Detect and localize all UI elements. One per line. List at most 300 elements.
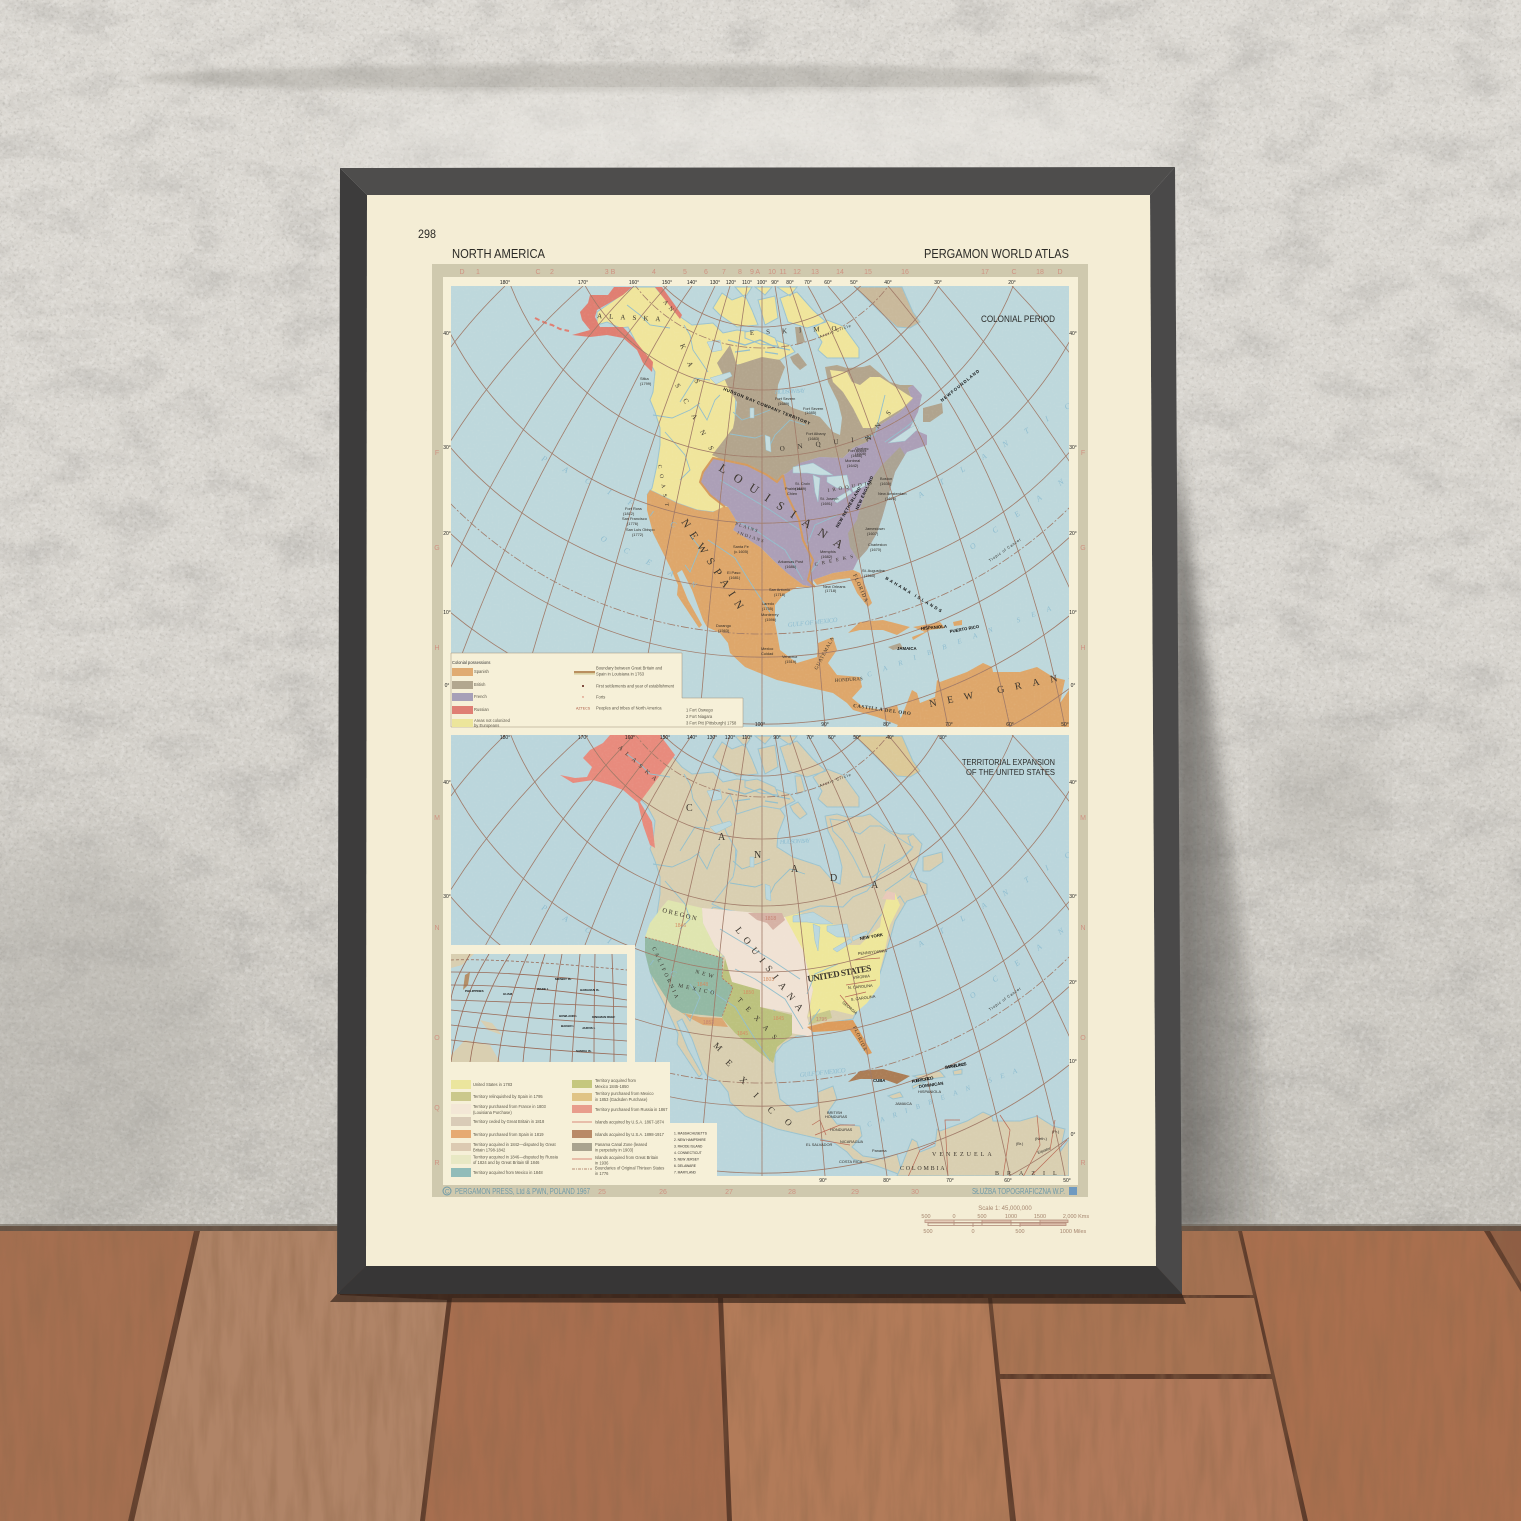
colonial period heading: COLONIAL PERIOD bbox=[981, 314, 1055, 325]
Greenland bbox=[855, 736, 920, 777]
meridian labels inside map bottom: 90° bbox=[821, 722, 829, 728]
graticule labels around maps: 60° bbox=[1004, 1178, 1012, 1184]
thirteen states key: 4. CONNECTICUT bbox=[674, 1151, 702, 1155]
graticule labels around maps: 60° bbox=[824, 280, 832, 286]
graticule labels around maps: 150° bbox=[660, 735, 670, 741]
place labels expansion map: CALIFORNIA bbox=[650, 946, 680, 1002]
left column: of 1824 and by Great Britain till 1846 bbox=[473, 1160, 540, 1165]
legend: colonial period: Colonial possessions bbox=[452, 660, 490, 665]
1818 cession bbox=[748, 913, 785, 930]
place labels colonial map: El Paso bbox=[727, 570, 740, 575]
place labels expansion map: COLOMBIA bbox=[900, 1166, 946, 1172]
frame floor shadow bbox=[330, 1294, 1186, 1304]
footer band text: 25 bbox=[598, 1189, 606, 1196]
place labels colonial map: HISPANIOLA bbox=[921, 624, 947, 631]
place labels expansion map: (Fr.) bbox=[1052, 1129, 1060, 1134]
place labels expansion map: HISPANIOLA bbox=[918, 1089, 941, 1094]
place labels expansion map: A bbox=[791, 864, 799, 875]
Greenland bbox=[855, 287, 920, 328]
place labels colonial map: San Antonio bbox=[769, 587, 790, 592]
graticule labels around maps: 160° bbox=[629, 280, 639, 286]
place labels colonial map: Santa Fe bbox=[733, 544, 749, 549]
place labels expansion map: A bbox=[871, 880, 879, 891]
place labels colonial map: (1689) bbox=[795, 486, 807, 491]
graticule labels around maps: 10° bbox=[443, 610, 451, 616]
border grid references: 5 bbox=[683, 269, 687, 276]
footer band text: SŁUŻBA TOPOGRAFICZNA W.P. bbox=[972, 1187, 1065, 1196]
place labels colonial map: (1686) bbox=[851, 453, 863, 458]
place labels expansion map: TEXAS bbox=[736, 996, 784, 1047]
Alaska purchase bbox=[560, 735, 675, 848]
place labels expansion map: PACIFIC bbox=[539, 902, 695, 988]
place labels colonial map: Jamestown bbox=[865, 526, 885, 531]
border grid references: O bbox=[434, 1035, 440, 1042]
thirteen states key: 5. NEW JERSEY bbox=[674, 1158, 700, 1162]
place labels expansion map bbox=[539, 745, 1089, 1177]
place labels expansion map: D bbox=[830, 873, 837, 884]
place labels colonial map: (1563) bbox=[718, 628, 730, 633]
place labels expansion map: (Br.) bbox=[1016, 1141, 1024, 1146]
place labels colonial map: San Luis Obispo bbox=[626, 527, 655, 532]
place labels colonial map: Tropic of Cancer bbox=[988, 537, 1022, 563]
place labels expansion map: VENEZUELA bbox=[932, 1152, 995, 1158]
place labels colonial map: (1691) bbox=[821, 501, 833, 506]
map heading bbox=[962, 757, 1055, 777]
place labels colonial map: HUDSON BAY COMPANY TERRITORY bbox=[723, 386, 811, 426]
boundary Great Britain and Spain bbox=[700, 458, 815, 587]
map heading: TERRITORIAL EXPANSION bbox=[962, 757, 1055, 767]
Russian Alaska bbox=[535, 287, 682, 372]
thirteen states key: 1. MASSACHUSETTS bbox=[674, 1132, 708, 1136]
place labels expansion map: C bbox=[766, 1104, 777, 1116]
place labels expansion map: I bbox=[752, 1090, 761, 1100]
graticule labels around maps: 40° bbox=[443, 780, 451, 786]
footer band text: 27 bbox=[725, 1189, 733, 1196]
place labels colonial map: Cuidad bbox=[761, 651, 773, 656]
graticule labels around maps: 90° bbox=[771, 280, 779, 286]
place labels expansion map: X bbox=[738, 1074, 750, 1086]
place labels colonial map: Veracruz bbox=[782, 654, 797, 659]
scale bar: 500 bbox=[921, 1214, 931, 1220]
place labels colonial map: (1689) bbox=[778, 401, 790, 406]
meridian labels bottom: 100° bbox=[757, 1177, 767, 1183]
inset map: Pacific islands: KINGMAN REEF bbox=[592, 1015, 615, 1019]
swatch Spanish bbox=[452, 668, 473, 676]
Cuba bbox=[848, 1069, 910, 1084]
left column: Territory acquired in 1842—disputed by Great bbox=[473, 1142, 556, 1147]
place labels colonial map: ANS bbox=[862, 400, 901, 443]
Texas bbox=[722, 958, 792, 1063]
land base bbox=[597, 736, 1069, 1176]
place labels colonial map: Laredo bbox=[762, 601, 774, 606]
map border band bbox=[432, 264, 1088, 1197]
scale bar: 1500 bbox=[1034, 1214, 1046, 1220]
place labels colonial map: FLORIDA bbox=[851, 573, 869, 604]
right column bbox=[572, 1078, 668, 1176]
border grid references: 3 B bbox=[605, 269, 616, 276]
legend: colonial period: 1 Fort Oswego bbox=[686, 708, 714, 712]
thirteen states key: 3. RHODE ISLAND bbox=[674, 1144, 703, 1148]
page number: 298 bbox=[418, 227, 436, 241]
thirteen states key: 7. MARYLAND bbox=[674, 1170, 697, 1174]
place labels expansion map: Equator bbox=[1037, 1145, 1052, 1155]
border grid references: Q bbox=[434, 1105, 440, 1112]
rivers bbox=[627, 305, 915, 612]
lakes and St Lawrence bbox=[707, 340, 919, 503]
place labels colonial map: (1772) bbox=[632, 532, 644, 537]
place labels expansion map: Arctic Circle bbox=[819, 772, 851, 788]
legend: colonial period: Spanish bbox=[474, 669, 490, 674]
Florida bbox=[807, 1020, 872, 1055]
place labels colonial map: Quebec bbox=[855, 446, 869, 451]
Oregon bbox=[645, 900, 723, 957]
right column: in 1776 bbox=[595, 1171, 609, 1176]
graticule labels around maps: 50° bbox=[1063, 1178, 1071, 1184]
print mottling over maps bbox=[451, 286, 1069, 1176]
place labels colonial map: CREEKS bbox=[814, 554, 858, 568]
legend: colonial period: French bbox=[474, 694, 487, 699]
boundary symbol bbox=[574, 671, 595, 675]
place labels colonial map: Charleston bbox=[868, 542, 887, 547]
place labels expansion map: CUBA bbox=[873, 1078, 885, 1083]
place labels colonial map: (1683) bbox=[808, 436, 820, 441]
border grid references: M bbox=[434, 815, 440, 822]
territory from Spain 1795 bbox=[808, 1010, 832, 1025]
graticule labels around maps: 30° bbox=[443, 445, 451, 451]
place labels colonial map: San Francisco bbox=[622, 516, 647, 521]
place labels expansion map: S. CAROLINA bbox=[850, 994, 876, 1002]
swatch British bbox=[452, 681, 473, 689]
border grid references: 8 bbox=[738, 269, 742, 276]
graticule labels around maps: 130° bbox=[710, 280, 720, 286]
place labels colonial map: Fort Severn bbox=[803, 406, 823, 411]
place labels colonial map: St. Croix bbox=[795, 481, 810, 486]
place labels colonial map: COAST bbox=[656, 464, 670, 513]
graticule labels around maps: 170° bbox=[578, 280, 588, 286]
place labels colonial map: ONQUIN bbox=[779, 432, 885, 453]
border grid references: H bbox=[434, 645, 440, 652]
graticule labels around maps: 60° bbox=[828, 735, 836, 741]
footer band text: C bbox=[445, 1188, 450, 1196]
graticule labels around maps: 30° bbox=[934, 280, 942, 286]
inset map: Pacific islands: MIDWAY IS. bbox=[555, 977, 572, 981]
place labels expansion map: OREGON bbox=[662, 907, 699, 923]
legend: colonial period: Spain in Louisiana in 1763 bbox=[596, 672, 645, 676]
thirteen states key: 2. NEW HAMPSHIRE bbox=[674, 1138, 707, 1142]
graticule labels around maps: 140° bbox=[687, 735, 697, 741]
graticule labels around maps: 20° bbox=[1069, 980, 1077, 986]
graticule labels around maps: 40° bbox=[1069, 780, 1077, 786]
graticule labels around maps: 90° bbox=[819, 1178, 827, 1184]
border grid references: 17 bbox=[981, 269, 989, 276]
graticule labels around maps: 0° bbox=[445, 683, 449, 689]
place labels colonial map: OCEAN bbox=[599, 534, 716, 599]
legend: colonial period: Russian bbox=[474, 707, 490, 712]
footer band text: 30 bbox=[911, 1189, 919, 1196]
place labels colonial map: New Orleans bbox=[823, 584, 846, 589]
place labels colonial map: Arctic Circle bbox=[819, 323, 851, 339]
place labels expansion map: 1803 bbox=[763, 977, 774, 983]
graticule labels around maps: 90° bbox=[773, 735, 781, 741]
place labels colonial map: KAS bbox=[678, 343, 707, 398]
place labels colonial map: Fort Severn bbox=[775, 396, 795, 401]
place labels expansion map: PENNSYLVANIA bbox=[858, 948, 888, 956]
place labels expansion map: 1845 bbox=[737, 1031, 748, 1037]
Gadsden purchase bbox=[682, 1013, 728, 1027]
legend: colonial period: Areas not colonized bbox=[474, 718, 511, 723]
border grid references: F bbox=[1081, 450, 1085, 457]
place labels expansion map: OCEAN bbox=[968, 913, 1083, 1001]
place labels expansion map: 1846 bbox=[675, 923, 686, 929]
place labels colonial map: ATLANTIC bbox=[916, 391, 1089, 500]
meridian labels inside map bottom: 60° bbox=[1006, 722, 1014, 728]
place labels expansion map: JAMAICA bbox=[895, 1101, 912, 1106]
United States in 1783 bbox=[785, 893, 900, 1017]
border grid references: D bbox=[1057, 269, 1063, 276]
place labels expansion map: N. CAROLINA bbox=[848, 983, 873, 990]
place labels expansion map: 1845 bbox=[773, 1016, 784, 1022]
right column: Islands acquired from Great Britain bbox=[595, 1155, 659, 1160]
place labels colonial map: (1608) bbox=[855, 451, 867, 456]
place labels expansion map: C bbox=[686, 803, 693, 814]
place labels colonial map: SCANS bbox=[673, 382, 721, 463]
place labels colonial map: CARIBBEAN SEA bbox=[866, 601, 1063, 679]
inset map: Pacific islands: WAKE I. bbox=[537, 987, 549, 991]
meridian labels inside map bottom: 100° bbox=[755, 722, 765, 728]
place labels colonial map: OCEAN bbox=[968, 464, 1083, 552]
place labels colonial map: INDIANS bbox=[737, 530, 766, 544]
border grid references: N bbox=[434, 925, 440, 932]
ocean bbox=[451, 286, 1069, 727]
place labels colonial map: Durango bbox=[716, 623, 731, 628]
place labels colonial map: NEWFOUNDLAND bbox=[939, 368, 981, 403]
border grid references: G bbox=[434, 545, 440, 552]
place labels colonial map: New Amsterdam bbox=[878, 491, 907, 496]
place labels colonial map: GULF OF MEXICO bbox=[787, 617, 838, 629]
place labels colonial map: St. Augustine bbox=[862, 568, 885, 573]
place labels colonial map: PUERTO RICO bbox=[949, 624, 980, 634]
place labels expansion map: BRITISH bbox=[827, 1110, 843, 1115]
right column: in perpetuity in 1903) bbox=[595, 1148, 634, 1152]
footer band text bbox=[443, 1187, 1077, 1196]
place labels colonial map: CASTILLA DEL ORO bbox=[853, 704, 912, 717]
legend: colonial period: by Europeans bbox=[474, 723, 499, 728]
left column: (Louisiana Purchase) bbox=[473, 1110, 512, 1115]
British colonies bbox=[848, 447, 905, 560]
scale bar: Scale 1: 45,000,000 bbox=[978, 1206, 1032, 1212]
right column: Islands acquired by U.S.A. 1867-1874 bbox=[595, 1120, 665, 1124]
place labels expansion map: MEXICO bbox=[678, 983, 718, 997]
graticule labels around maps: 110° bbox=[742, 735, 752, 741]
place labels expansion map: UNITED STATES bbox=[807, 963, 872, 984]
place labels colonial map: (1685) bbox=[805, 410, 817, 415]
graticule labels around maps: 80° bbox=[786, 280, 794, 286]
graticule labels around maps bbox=[443, 280, 1077, 1184]
place labels colonial map: Montreal bbox=[845, 458, 860, 463]
US territorial acquisitions bbox=[645, 891, 900, 1063]
border grid references: 4 bbox=[652, 269, 656, 276]
right column: Islands acquired by U.S.A. 1898-1917 bbox=[595, 1132, 665, 1137]
graticule labels around maps: 120° bbox=[725, 735, 735, 741]
place labels colonial map bbox=[539, 299, 1123, 717]
place labels colonial map: (c.1605) bbox=[734, 549, 749, 554]
border grid references: O bbox=[1080, 1035, 1086, 1042]
border grid references: 14 bbox=[836, 269, 844, 276]
legend: colonial period: Peoples and tribes of North America bbox=[596, 706, 662, 710]
place labels colonial map: (1755) bbox=[762, 606, 774, 611]
place labels expansion map: PUERTO RICO bbox=[911, 1075, 934, 1084]
legend: territorial expansion bbox=[451, 1062, 717, 1177]
place labels colonial map: (1642) bbox=[847, 463, 859, 468]
graticule labels around maps: 30° bbox=[1069, 445, 1077, 451]
legend: colonial period: Boundary between Great Britain and bbox=[596, 666, 663, 670]
graticule labels around maps: 110° bbox=[742, 280, 752, 286]
right column: Mexico 1845-1850 bbox=[595, 1084, 629, 1089]
graticule labels around maps: 30° bbox=[939, 735, 947, 741]
border grid references: R bbox=[1080, 1160, 1086, 1167]
graticule labels around maps: 10° bbox=[1069, 1059, 1077, 1065]
scale bar: 500 bbox=[923, 1229, 933, 1235]
place labels colonial map: (1812) bbox=[623, 511, 635, 516]
inset map: Pacific islands: GUAM bbox=[503, 992, 513, 996]
place labels expansion map: HONDURAS bbox=[825, 1114, 848, 1119]
graticule labels around maps: 40° bbox=[886, 735, 894, 741]
Labrador unclaimed area bbox=[830, 370, 913, 428]
graticule labels around maps: 50° bbox=[853, 735, 861, 741]
ocean bbox=[451, 735, 1069, 1176]
graticule labels around maps: 30° bbox=[1069, 894, 1077, 900]
place labels expansion map: SWAN ISLANDS bbox=[944, 1061, 967, 1070]
right column: in 1936 bbox=[595, 1160, 609, 1166]
Louisiana purchase bbox=[702, 908, 813, 1037]
Spanish possessions bbox=[647, 490, 1069, 727]
place labels colonial map: (1596) bbox=[765, 617, 777, 622]
place labels expansion map: VIRGINIA bbox=[853, 973, 870, 980]
graticule labels around maps: 40° bbox=[443, 331, 451, 337]
place labels expansion map: M bbox=[712, 1040, 724, 1053]
graticule labels around maps: 0° bbox=[1071, 1132, 1075, 1138]
place labels colonial map: HUDSON BAY bbox=[774, 388, 806, 396]
place labels expansion map: CARIBBEAN SEA bbox=[866, 1064, 1027, 1129]
place labels colonial map: NEW GRANADA bbox=[928, 660, 1123, 710]
inset map: Pacific islands: JARVIS I. bbox=[582, 1026, 595, 1030]
inset map: Pacific islands: HAWAIIAN IS. bbox=[580, 988, 600, 992]
place labels expansion map: LOUISIANA bbox=[733, 926, 808, 1019]
border grid references: G bbox=[1080, 545, 1086, 552]
place labels colonial map: St. Joseph bbox=[820, 496, 838, 501]
atlas title: PERGAMON WORLD ATLAS bbox=[924, 247, 1069, 261]
border grid references: 18 bbox=[1036, 269, 1044, 276]
place labels colonial map: ALASKA bbox=[597, 312, 668, 324]
right column: Territory acquired from bbox=[595, 1078, 637, 1083]
place labels colonial map: (1670) bbox=[870, 547, 882, 552]
place labels colonial map: Fort Abitibi bbox=[848, 448, 867, 453]
graticule labels around maps: 120° bbox=[726, 280, 736, 286]
graticule bbox=[445, 366, 1075, 1239]
legend: colonial period: AZTECS bbox=[576, 706, 591, 710]
legend: colonial period: 3 Fort Pitt (Pittsburgh) 1758 bbox=[686, 720, 737, 726]
place labels expansion map: HONDURAS bbox=[830, 1127, 853, 1132]
place labels expansion map: DOMINICAN bbox=[918, 1081, 944, 1089]
place labels colonial map: (1718) bbox=[825, 588, 837, 593]
place labels expansion map: 1853 bbox=[703, 1020, 714, 1026]
swatch not colonized bbox=[452, 719, 473, 727]
graticule bbox=[451, 286, 1069, 727]
place labels colonial map: BAHAMA ISLANDS bbox=[884, 576, 944, 614]
place labels colonial map: Fort Albany bbox=[806, 431, 826, 436]
place labels colonial map: JAMAICA bbox=[897, 646, 917, 651]
thirteen states key: 6. DELAWARE bbox=[674, 1164, 697, 1168]
graticule labels around maps: 0° bbox=[1071, 683, 1075, 689]
graticule labels around maps: 30° bbox=[443, 894, 451, 900]
scale bar: 500 bbox=[977, 1214, 987, 1220]
place labels expansion map: A bbox=[718, 832, 726, 843]
place labels expansion map: ATLANTIC bbox=[916, 840, 1089, 949]
meridian labels inside map bottom bbox=[755, 722, 1068, 726]
place labels expansion map: GULF OF MEXICO bbox=[799, 1067, 846, 1079]
place labels colonial map: (1626) bbox=[885, 496, 897, 501]
inset map: Pacific islands: SAMOA IS. bbox=[576, 1049, 592, 1053]
place labels expansion map: EL SALVADOR bbox=[806, 1142, 832, 1147]
place labels colonial map: IROQUOIS bbox=[827, 481, 876, 494]
place labels colonial map: (1519) bbox=[785, 659, 797, 664]
border grid references: 11 bbox=[779, 269, 787, 276]
Mexican cession bbox=[645, 937, 733, 1017]
Newfoundland and other British islands bbox=[790, 327, 943, 650]
legend: colonial period: British bbox=[474, 682, 486, 687]
fort symbol bbox=[582, 696, 584, 698]
border grid references: 2 bbox=[550, 269, 554, 276]
border grid references: 9 A bbox=[750, 269, 760, 276]
place labels colonial map: (1565) bbox=[864, 573, 876, 578]
graticule labels around maps: 150° bbox=[662, 280, 672, 286]
place labels expansion map: NEW YORK bbox=[859, 932, 884, 941]
border grid references: 1 bbox=[476, 269, 480, 276]
border grid references: M bbox=[1080, 815, 1086, 822]
place labels colonial map: Fort Ross bbox=[625, 506, 642, 511]
place labels colonial map: Sitka bbox=[640, 376, 649, 381]
border grid references: 15 bbox=[864, 269, 872, 276]
graticule labels around maps: 100° bbox=[757, 280, 767, 286]
border grid references: F bbox=[435, 450, 439, 457]
map: territorial expansion bbox=[451, 735, 1069, 1176]
place labels expansion map: Panama bbox=[872, 1148, 887, 1153]
graticule labels around maps: 20° bbox=[1069, 531, 1077, 537]
place labels expansion map: NEW bbox=[694, 969, 717, 981]
footer band text: 26 bbox=[659, 1189, 667, 1196]
place labels colonial map: NEWSPAIN bbox=[678, 517, 749, 617]
border grid references: 7 bbox=[722, 269, 726, 276]
graticule labels around maps: 40° bbox=[884, 280, 892, 286]
place labels expansion map: GEORGIA bbox=[841, 1000, 859, 1016]
graticule labels around maps: 40° bbox=[1069, 331, 1077, 337]
place labels colonial map: (1799) bbox=[640, 381, 652, 386]
graticule labels around maps: 70° bbox=[804, 280, 812, 286]
place labels colonial map: AN bbox=[661, 299, 677, 316]
place labels expansion map: (Neth.) bbox=[1035, 1136, 1048, 1141]
place labels expansion map: Tropic of Cancer bbox=[988, 986, 1022, 1012]
thirteen states key bbox=[674, 1132, 708, 1174]
left column: Territory purchased from France in 1803 bbox=[473, 1104, 547, 1109]
legend: colonial period: Forts bbox=[596, 694, 605, 700]
place labels colonial map: Prairie du bbox=[785, 486, 802, 491]
frame shadow on wall bbox=[1172, 420, 1285, 1232]
graticule labels around maps: 170° bbox=[578, 735, 588, 741]
inset map: Pacific islands bbox=[451, 945, 635, 1065]
meridian labels inside map bottom: 70° bbox=[945, 722, 953, 728]
place labels colonial map: Chien bbox=[787, 491, 797, 496]
border grid references: H bbox=[1080, 645, 1086, 652]
